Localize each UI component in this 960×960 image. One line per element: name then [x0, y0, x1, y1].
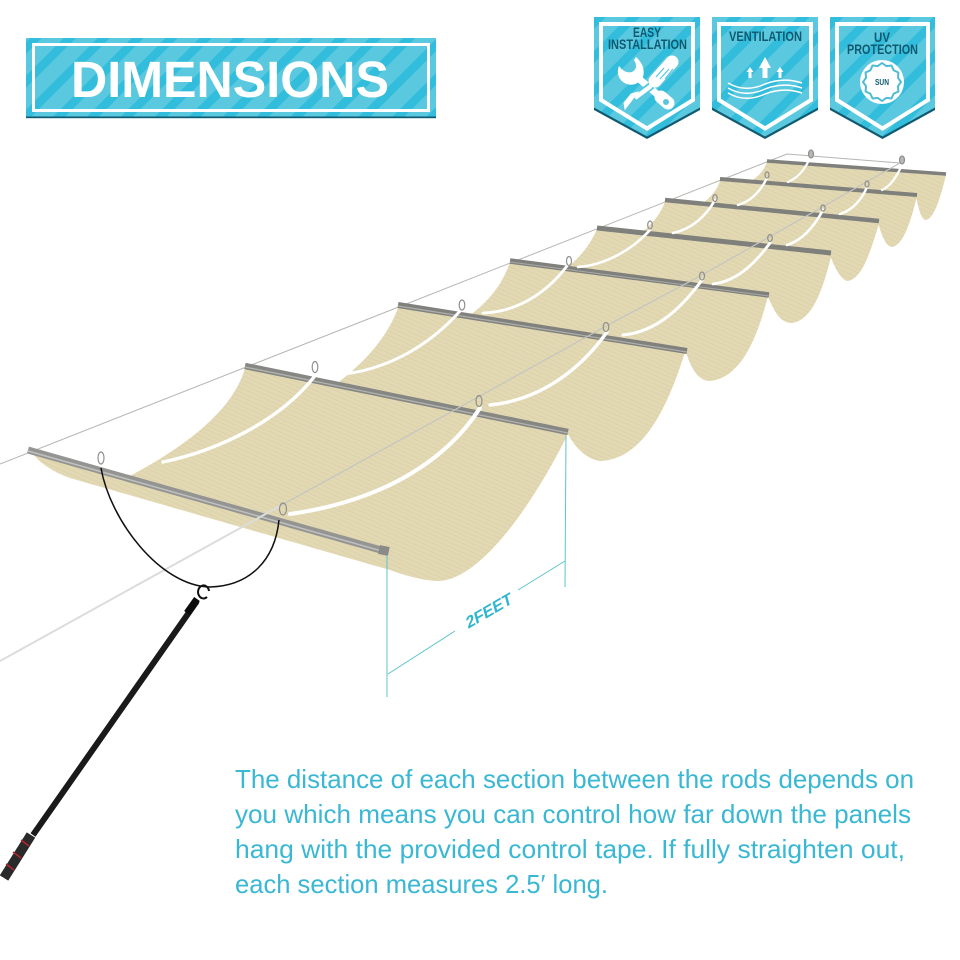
description text: you which means you can control how far down the panels	[235, 799, 911, 829]
title banner: DIMENSIONS	[71, 51, 389, 108]
front wire near segment	[0, 506, 280, 661]
fabric section 6	[697, 181, 917, 247]
fabric section 2	[335, 308, 685, 461]
icon: arrows and waves	[728, 57, 802, 98]
title banner	[26, 38, 436, 118]
description text: each section measures 2.5′ long.	[235, 869, 608, 899]
front support wire	[0, 163, 900, 661]
badge: ventilation	[712, 17, 818, 139]
hook loops	[98, 150, 904, 515]
fabric section 7	[750, 162, 946, 220]
rod 3	[398, 305, 687, 352]
description text: hang with the provided control tape. If fully straighten out,	[235, 834, 905, 864]
badge: uv protection: PROTECTION	[847, 41, 918, 57]
badge: uv protection: UV	[874, 29, 891, 45]
canopy: shade panels, rods and straps	[0, 150, 946, 661]
badge: easy installation: INSTALLATION	[608, 36, 687, 52]
badge: easy installation	[594, 17, 700, 139]
badge: easy installation: EASY	[633, 24, 661, 40]
badge: ventilation: VENTILATION	[729, 28, 802, 44]
icon: wrench and screwdriver	[618, 57, 673, 109]
rod 4	[510, 261, 769, 296]
dimension label: 2FEET	[464, 589, 514, 633]
pull pole with handle	[4, 585, 209, 878]
badge: uv protection	[830, 17, 935, 139]
description text: The distance of each section between the rods depends on	[235, 764, 914, 794]
rod 6	[665, 200, 879, 221]
rod 5	[597, 228, 831, 253]
icon: sun seal: SUN	[875, 78, 889, 87]
fabric section 1	[30, 368, 568, 581]
fabric section 4	[565, 229, 832, 323]
rod 8	[767, 161, 946, 174]
rod 1	[28, 450, 390, 556]
description text	[235, 764, 914, 899]
pull cord	[101, 468, 279, 587]
fabric section 3	[468, 262, 768, 381]
rod 7	[720, 179, 917, 195]
dimension lines	[387, 436, 566, 697]
rod 2	[245, 366, 568, 433]
fabric section 5	[637, 202, 880, 281]
control straps	[163, 162, 902, 514]
rear support wire	[0, 154, 900, 464]
